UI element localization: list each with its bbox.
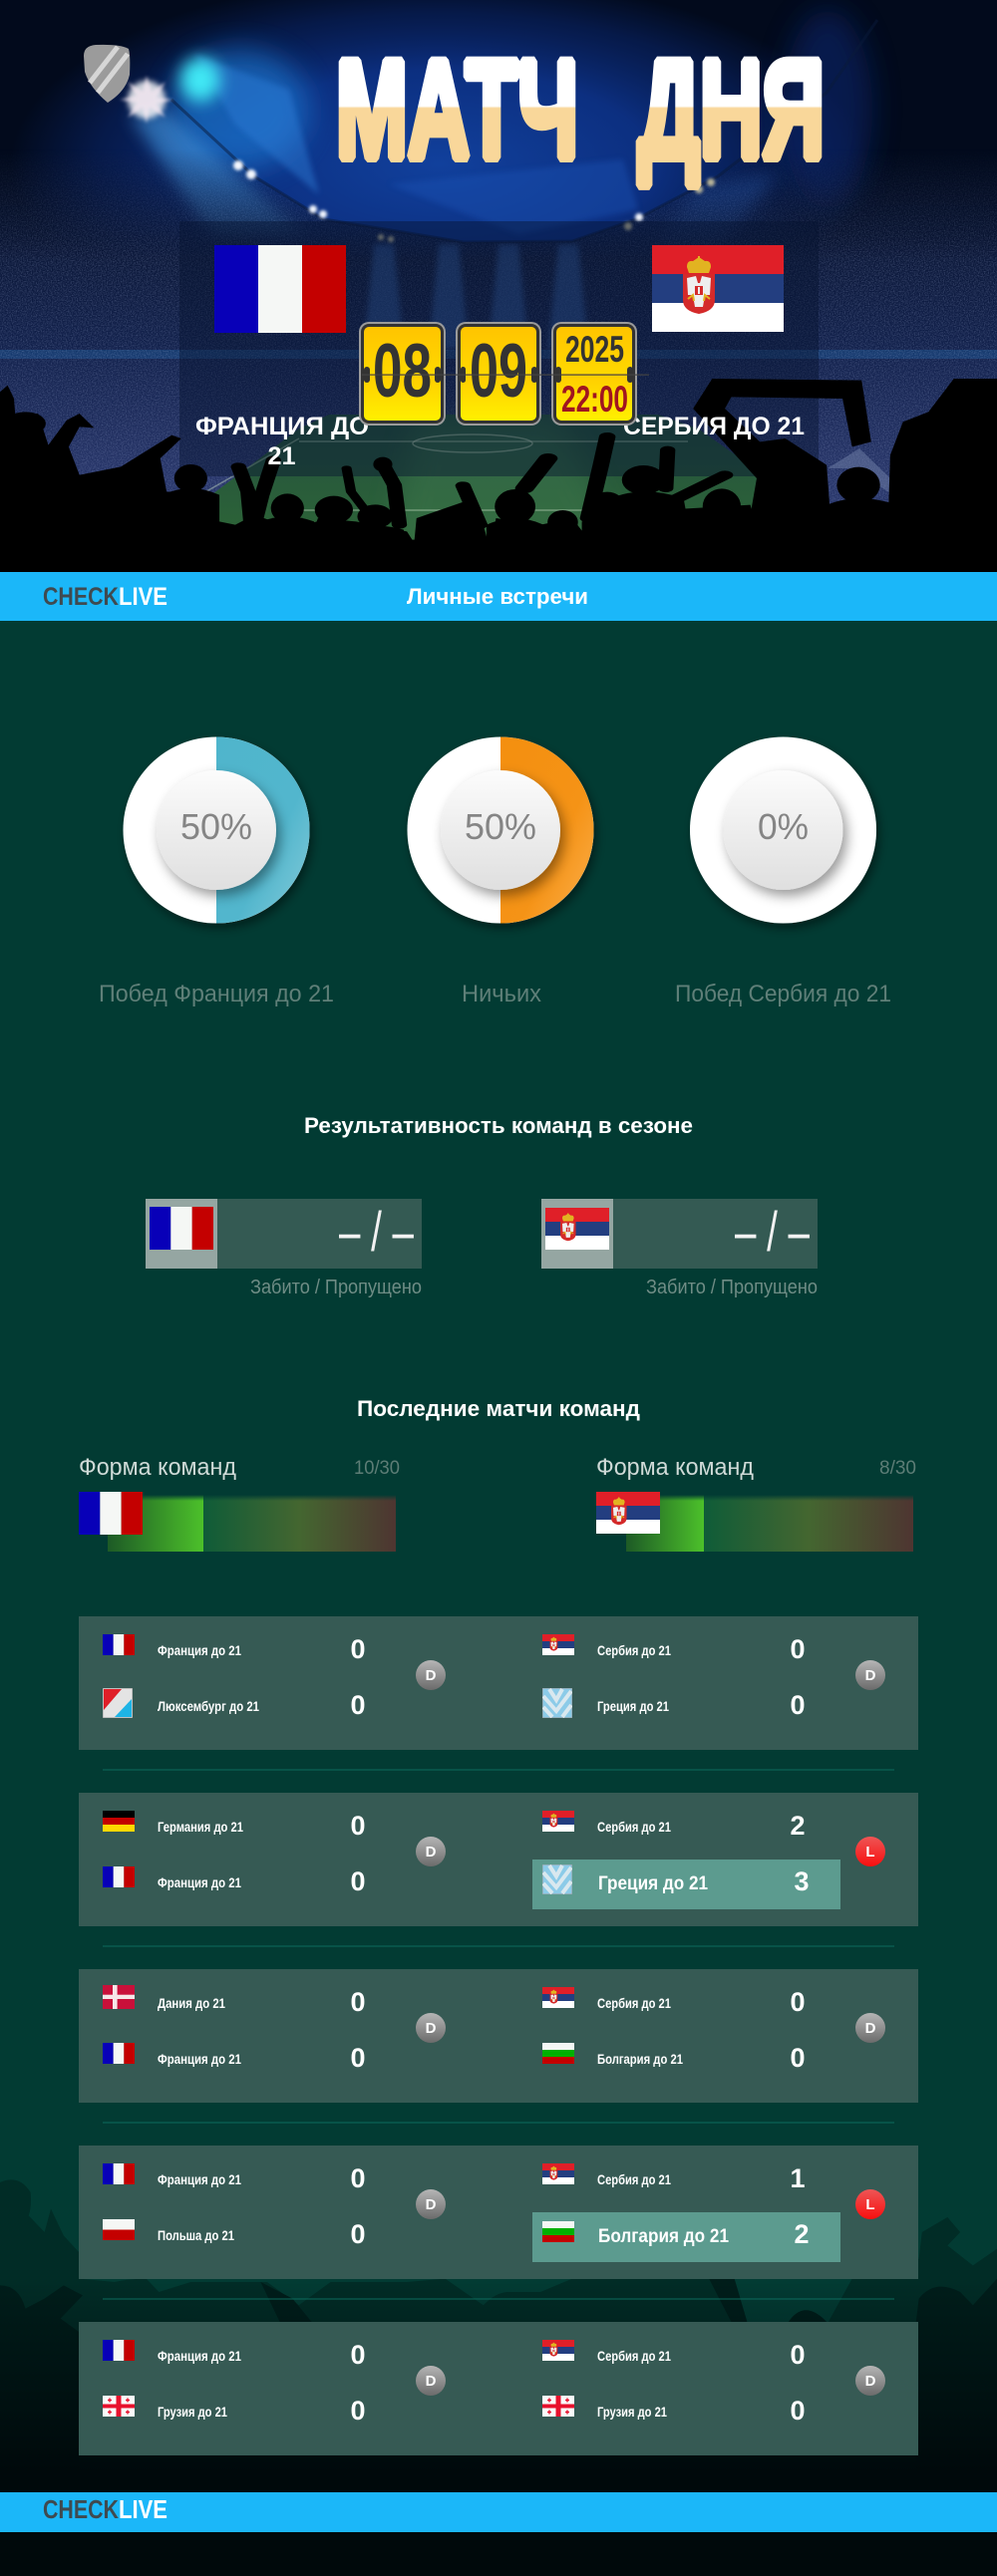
hero: crowd silhouette xyxy=(0,379,997,578)
title: ДНЯ xyxy=(638,31,825,187)
donut labels xyxy=(99,981,891,1007)
France team match: Франция до 21 xyxy=(158,2051,241,2067)
team name: France: 21 xyxy=(267,442,296,470)
Serbia team match: D xyxy=(865,2020,876,2037)
Serbia team match xyxy=(542,1634,885,1720)
match panel 1 xyxy=(79,1616,918,1750)
date: flip card day xyxy=(359,322,446,426)
centre crowd mass xyxy=(203,515,420,551)
logo: CheckLive: CHECK xyxy=(43,2494,119,2524)
Serbia team match xyxy=(542,1987,885,2073)
Serbia team match: Греция до 21 xyxy=(598,1873,708,1894)
flag xyxy=(596,1492,660,1534)
France team match: 0 xyxy=(350,2219,366,2249)
France team match: D xyxy=(426,2020,437,2037)
Serbia team match: 2 xyxy=(790,1811,806,1841)
caption: Забито / Пропущено xyxy=(646,1277,818,1298)
donut: France wins: 50% xyxy=(180,806,252,847)
date: flip card month: 09 xyxy=(470,329,527,414)
heading: last matches: Последние матчи команд xyxy=(357,1396,640,1421)
donut: draws xyxy=(407,737,594,923)
flag: France xyxy=(214,245,346,333)
Serbia team match xyxy=(532,2163,885,2262)
Serbia team match: Грузия до 21 xyxy=(597,2404,667,2420)
France team match: Люксембург до 21 xyxy=(158,1698,259,1714)
Serbia team match: Греция до 21 xyxy=(597,1698,669,1714)
France team match: D xyxy=(426,2196,437,2213)
Serbia team match: 2 xyxy=(794,2219,810,2249)
form: France: 10/30 xyxy=(354,1458,400,1479)
France team match: 0 xyxy=(350,1987,366,2017)
team name: Serbia: СЕРБИЯ ДО 21 xyxy=(623,413,805,440)
flag xyxy=(545,1208,609,1250)
Serbia team match: 0 xyxy=(790,2340,806,2370)
France team match: Франция до 21 xyxy=(158,1642,241,1658)
France team match: D xyxy=(426,1667,437,1684)
goals scored / conceded: – / – xyxy=(735,1200,811,1263)
France team match: Грузия до 21 xyxy=(158,2404,227,2420)
France team match xyxy=(103,1634,446,1720)
France team match xyxy=(103,2163,446,2249)
donut labels: Побед Франция до 21 xyxy=(99,981,334,1007)
date: flip card month xyxy=(456,322,541,426)
Serbia team match: 0 xyxy=(790,1690,806,1720)
match panel 5 xyxy=(79,2322,918,2455)
donut: France wins xyxy=(124,737,309,923)
Serbia team match: 3 xyxy=(794,1866,810,1896)
winner highlight xyxy=(532,2212,840,2262)
footer bar xyxy=(0,2492,997,2532)
Serbia team match xyxy=(542,2340,885,2426)
Serbia team match: L xyxy=(865,1844,875,1860)
France team match: 0 xyxy=(350,1866,366,1896)
Serbia team match: 1 xyxy=(790,2163,806,2193)
Serbia team match xyxy=(532,1811,885,1909)
form: Serbia: Форма команд xyxy=(596,1454,754,1481)
France team match: Франция до 21 xyxy=(158,1874,241,1890)
form: Serbia xyxy=(596,1454,916,1552)
donut labels: Побед Сербия до 21 xyxy=(675,981,891,1007)
Serbia team match: 0 xyxy=(790,1634,806,1664)
France team match xyxy=(103,2340,446,2426)
hero: dark score panel xyxy=(179,221,819,476)
centre right crowd xyxy=(490,505,763,551)
team name: France xyxy=(195,413,369,470)
caption: Забито / Пропущено xyxy=(250,1277,422,1298)
France team match: 0 xyxy=(350,2396,366,2426)
France team match: 0 xyxy=(350,2163,366,2193)
flag xyxy=(150,1207,213,1250)
section title: head to head: Личные встречи xyxy=(407,584,588,609)
right crowd xyxy=(836,467,880,503)
flag: Serbia xyxy=(652,245,784,332)
date: flip card year and time xyxy=(551,322,637,426)
date: flip card day: 08 xyxy=(373,329,432,414)
form: France xyxy=(79,1454,400,1552)
match panel 3 xyxy=(79,1969,918,2103)
form: France: Форма команд xyxy=(79,1454,236,1481)
stat box: France xyxy=(146,1199,422,1298)
Serbia team match: 0 xyxy=(790,2043,806,2073)
left crowd mass xyxy=(0,386,219,578)
Serbia team match: Сербия до 21 xyxy=(597,1995,671,2011)
donut: draws: 50% xyxy=(465,806,536,847)
Serbia team match: Болгария до 21 xyxy=(597,2051,683,2067)
date: flip card year and time: 22:00 xyxy=(561,379,628,420)
Serbia team match: Сербия до 21 xyxy=(597,1819,671,1835)
hero: stadium background xyxy=(0,0,997,572)
header bar xyxy=(0,572,997,621)
form bar xyxy=(108,1495,396,1552)
date: flip card year and time: 2025 xyxy=(565,329,624,370)
France team match: Германия до 21 xyxy=(158,1819,243,1835)
logo: CheckLive: LIVE xyxy=(119,2494,167,2524)
background: bottom crowd silhouettes xyxy=(0,2179,997,2576)
scarf fan xyxy=(693,379,871,551)
form: Serbia: 8/30 xyxy=(879,1458,916,1479)
winner highlight xyxy=(532,1860,840,1909)
Serbia team match: 0 xyxy=(790,1987,806,2017)
France team match: D xyxy=(426,2373,437,2390)
France team match: Франция до 21 xyxy=(158,2348,241,2364)
Serbia team match: 0 xyxy=(790,2396,806,2426)
Serbia team match: Сербия до 21 xyxy=(597,2171,671,2187)
logo: CheckLive: CHECK xyxy=(43,583,119,611)
shield logo xyxy=(84,45,130,103)
match panel 2 xyxy=(79,1793,918,1926)
stat box: Serbia xyxy=(541,1199,818,1298)
France team match: Франция до 21 xyxy=(158,2171,241,2187)
France team match: Дания до 21 xyxy=(158,1995,225,2011)
France team match: Польша до 21 xyxy=(158,2227,234,2243)
Serbia team match: Сербия до 21 xyxy=(597,1642,671,1658)
Serbia team match: D xyxy=(865,1667,876,1684)
donut: Serbia wins: 0% xyxy=(758,806,809,847)
France team match: 0 xyxy=(350,1690,366,1720)
logo: CheckLive: LIVE xyxy=(119,583,167,611)
Serbia team match: L xyxy=(865,2196,875,2213)
donut: Serbia wins xyxy=(690,737,876,923)
heading: season performance: Результативность команд в сезоне xyxy=(304,1113,693,1138)
France team match: 0 xyxy=(350,2043,366,2073)
goals scored / conceded: – / – xyxy=(339,1200,415,1263)
donut labels: Ничьих xyxy=(462,981,541,1007)
flag xyxy=(79,1492,143,1535)
France team match: 0 xyxy=(350,2340,366,2370)
Serbia team match: Болгария до 21 xyxy=(598,2226,729,2247)
title: МАТЧ xyxy=(336,31,578,187)
Serbia team match: D xyxy=(865,2373,876,2390)
flip card hinges xyxy=(362,367,649,383)
France team match: 0 xyxy=(350,1634,366,1664)
France team match: D xyxy=(426,1844,437,1860)
France team match xyxy=(103,1985,446,2073)
Serbia team match: Сербия до 21 xyxy=(597,2348,671,2364)
form bar xyxy=(626,1495,913,1552)
France team match: 0 xyxy=(350,1811,366,1841)
team name: France: ФРАНЦИЯ ДО xyxy=(195,413,369,440)
France team match xyxy=(103,1811,446,1896)
match panel 4 xyxy=(79,2146,918,2279)
